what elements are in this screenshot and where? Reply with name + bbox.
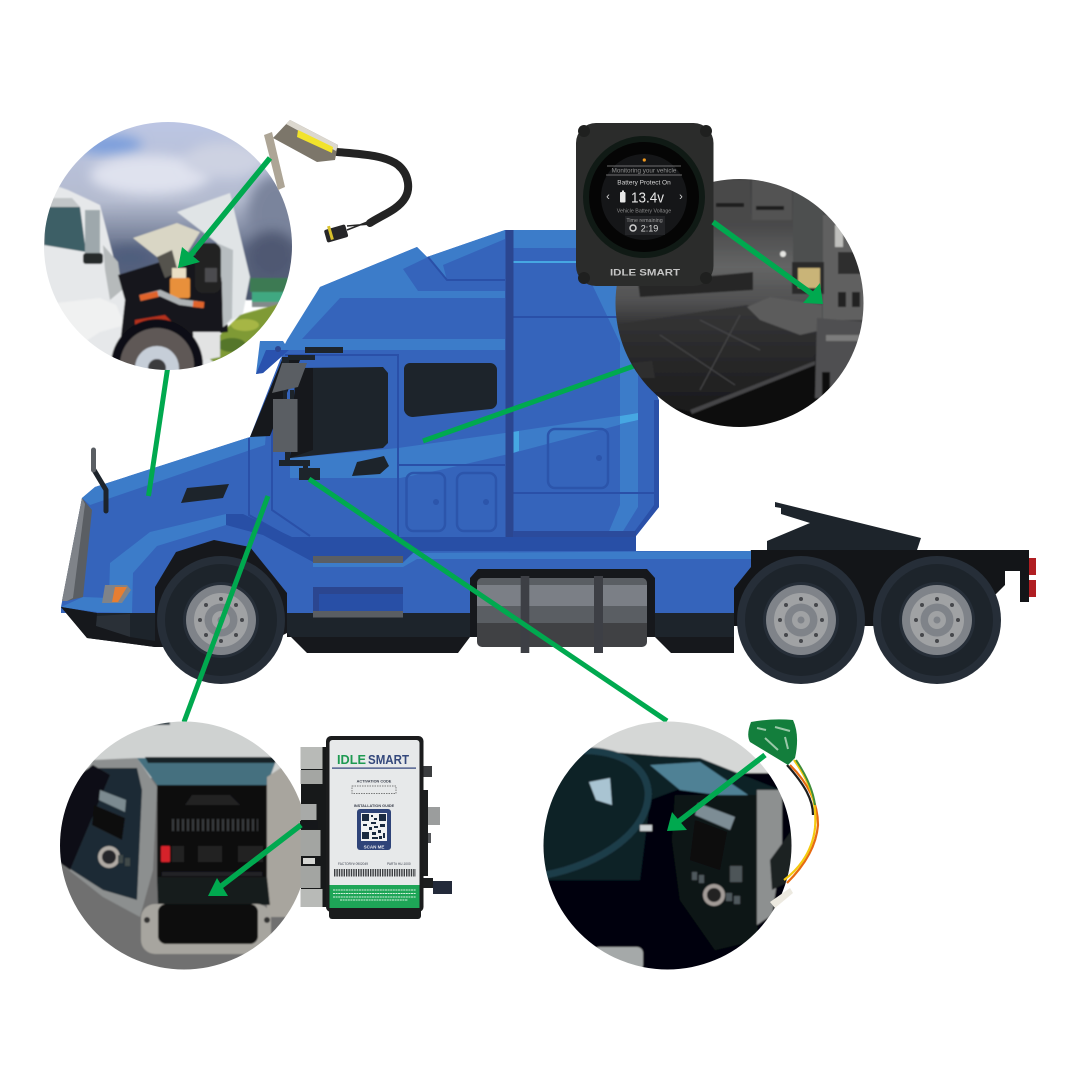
side panels xyxy=(406,429,608,531)
rear chassis xyxy=(734,550,1029,626)
windshield xyxy=(250,360,300,437)
QR code: SCAN ME xyxy=(364,844,384,849)
display corners xyxy=(578,125,712,284)
connector lines from truck to photo circles xyxy=(148,366,667,722)
door window xyxy=(290,367,388,458)
module case xyxy=(326,736,424,912)
control module xyxy=(300,736,452,919)
body trim lines xyxy=(249,257,659,538)
bright accents xyxy=(513,261,638,453)
front bumper xyxy=(61,607,155,647)
fifth wheel xyxy=(767,502,921,550)
darker roof insets xyxy=(302,239,505,339)
module ports xyxy=(423,766,452,894)
display screen: Monitoring your vehicle xyxy=(612,168,677,174)
module label xyxy=(330,740,420,908)
sensor with cable xyxy=(264,120,408,243)
exhaust stack xyxy=(94,450,106,511)
display screen: › xyxy=(679,191,683,203)
activation code: INSTALLATION GUIDE xyxy=(354,804,395,808)
control module: SMART xyxy=(368,753,409,767)
display screen: 13.4v xyxy=(631,190,664,206)
turn signal xyxy=(102,585,131,603)
green arrow: display to sleeper xyxy=(713,222,823,304)
green arrow: PCB to dash xyxy=(667,755,765,831)
photo: engine bay with raised hood xyxy=(44,122,292,370)
module logo: IDLE xyxy=(337,753,366,767)
rear wheel one xyxy=(737,556,865,684)
headlight xyxy=(62,498,92,601)
door vent xyxy=(352,456,389,476)
lower chassis skirt xyxy=(287,613,734,653)
activation code xyxy=(352,780,396,808)
rear edge trim xyxy=(631,400,659,536)
activation code: ACTIVATION CODE xyxy=(357,780,392,784)
display screen: Time remaining xyxy=(626,218,663,224)
truck illustration xyxy=(61,230,1036,684)
module connectors xyxy=(300,747,326,907)
display screen: Vehicle Battery Voltage xyxy=(617,208,671,214)
module identifiers: PART# HU-1000 xyxy=(387,862,411,866)
rear window xyxy=(404,363,497,417)
light upper cab panels xyxy=(61,230,751,613)
rear wheel two xyxy=(873,556,1001,684)
wheel arch xyxy=(155,540,287,647)
fuel tank xyxy=(470,569,655,653)
roof fairing xyxy=(256,341,289,374)
panel latches xyxy=(433,455,602,505)
green arrow: module to console xyxy=(208,825,301,896)
photo: truck dashboard centre console xyxy=(56,718,312,974)
display screen: ‹ xyxy=(606,191,610,203)
lower body band xyxy=(226,514,636,562)
module identifiers: FACTORY# 0902049 xyxy=(338,862,368,866)
display device xyxy=(576,123,714,286)
green instruction panel xyxy=(330,885,420,908)
cab pillar xyxy=(506,230,514,537)
tail lights xyxy=(1029,558,1036,597)
display screen xyxy=(583,136,705,258)
barcode xyxy=(333,869,416,876)
PCB with wires xyxy=(748,719,818,908)
hood vent xyxy=(181,484,229,503)
photo: steering wheel and dash xyxy=(540,718,796,974)
side steps xyxy=(313,556,403,618)
module identifiers xyxy=(338,862,411,866)
photo: sleeper cab interior xyxy=(610,175,870,432)
display screen: Battery Protect On xyxy=(617,180,671,186)
display logo: IDLE SMART xyxy=(610,268,680,278)
mirror assembly xyxy=(272,347,343,480)
QR code xyxy=(357,809,391,850)
display screen: 2:19 xyxy=(641,224,658,234)
front wheel xyxy=(157,556,285,684)
cab body xyxy=(61,230,751,613)
green arrow: sensor to engine xyxy=(178,158,270,268)
